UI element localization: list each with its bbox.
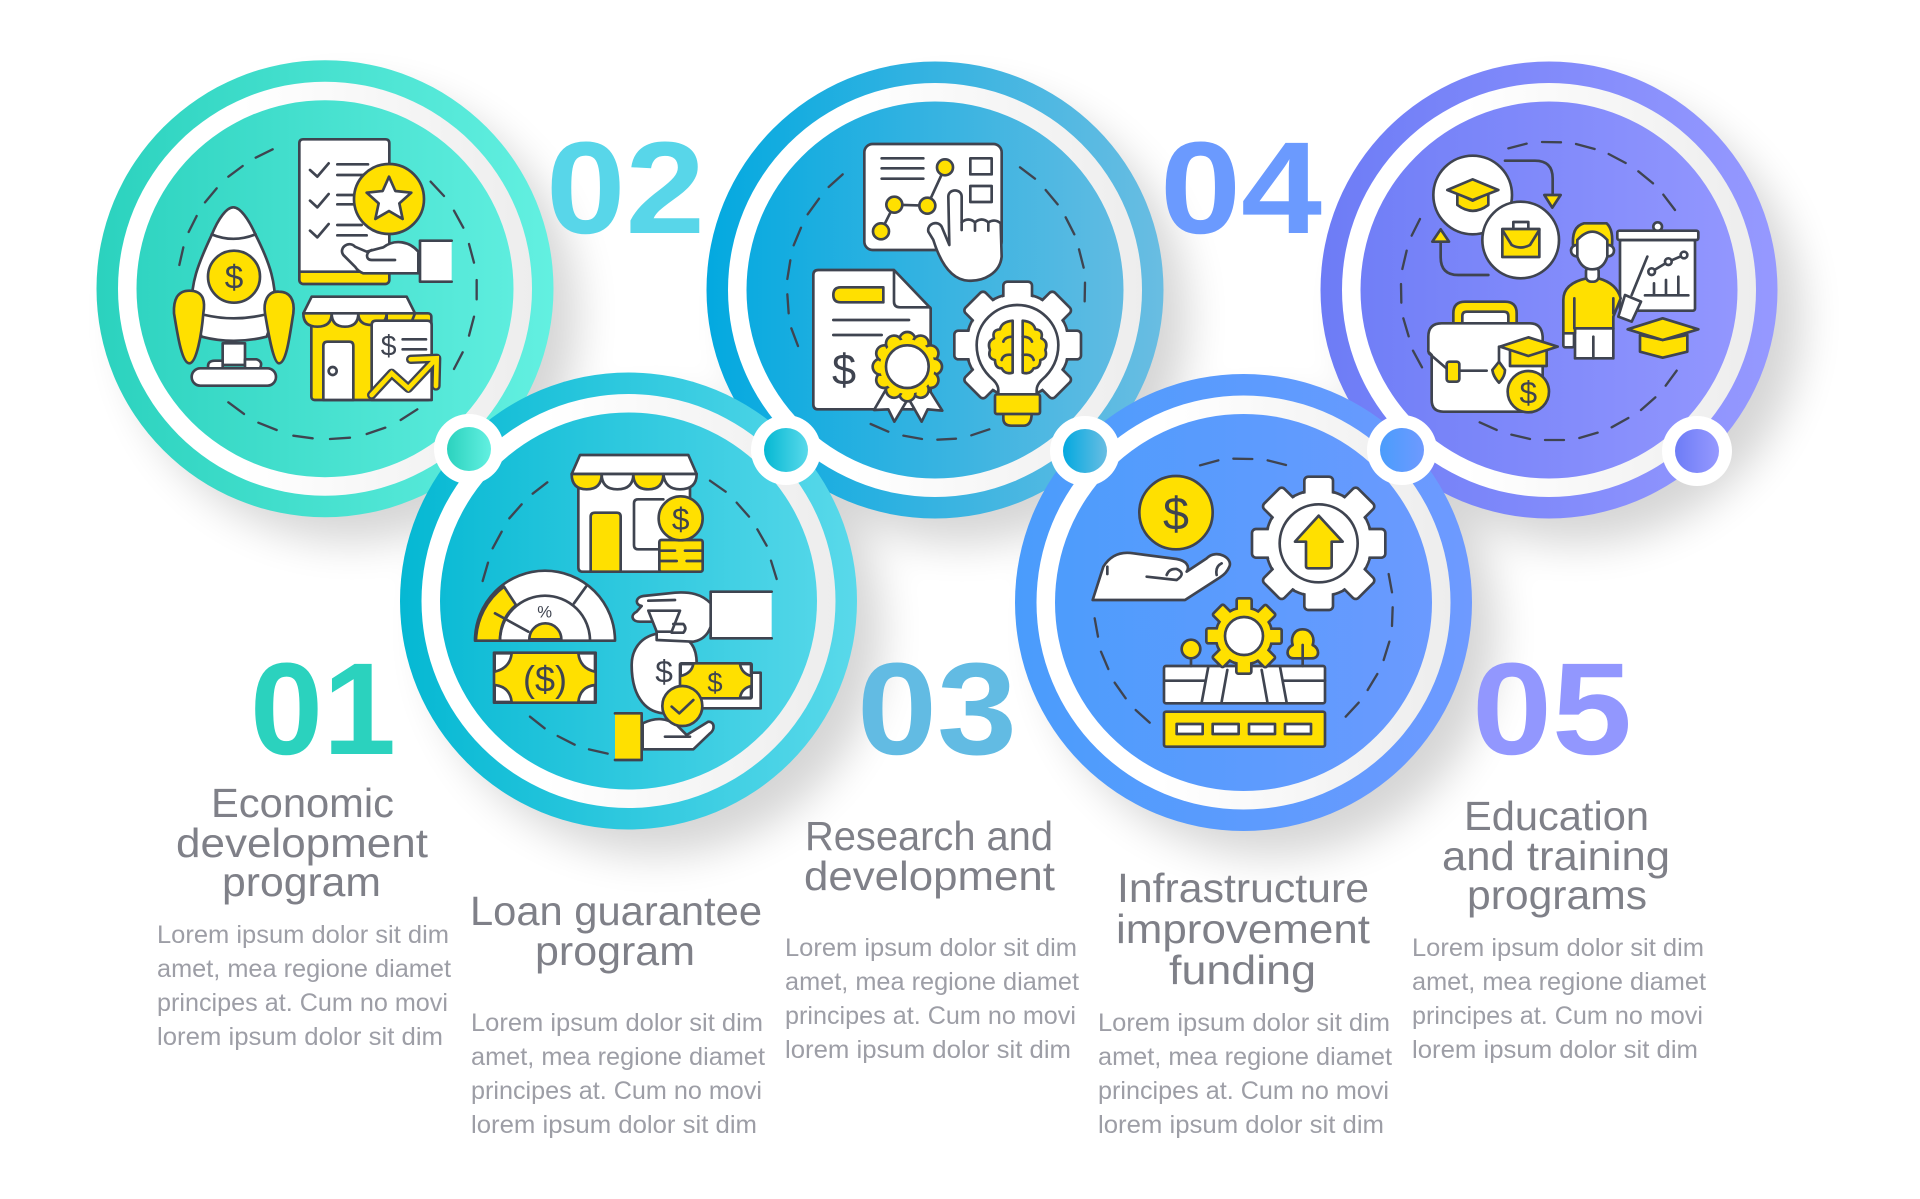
body text: step 3: amet, mea regione diamet — [785, 968, 1079, 996]
icon: store, gauge and money bag: % — [537, 602, 552, 621]
icon: rocket, checklist and store — [174, 139, 477, 439]
heading: step 1 — [176, 780, 429, 905]
body text: step 4: principes at. Cum no movi — [1098, 1077, 1389, 1105]
icon: rocket, checklist and store: $ — [381, 330, 397, 362]
body text: step 5: principes at. Cum no movi — [1412, 1002, 1703, 1030]
body text: step 5 — [1412, 934, 1706, 1064]
body text: step 5: lorem ipsum dolor sit dim — [1412, 1036, 1698, 1064]
heading: step 2: program — [535, 928, 695, 974]
body text: step 2: lorem ipsum dolor sit dim — [471, 1111, 757, 1139]
icon: store, gauge and money bag: ($) — [523, 658, 567, 699]
body text: step 5: amet, mea regione diamet — [1412, 968, 1706, 996]
panel: step 3 circle — [706, 62, 1164, 518]
body text: step 1: principes at. Cum no movi — [157, 989, 448, 1017]
body text: step 4: Lorem ipsum dolor sit dim — [1098, 1009, 1390, 1037]
heading: step 1: program — [222, 859, 381, 905]
body text: step 1: Lorem ipsum dolor sit dim — [157, 921, 449, 949]
heading: step 4 — [1116, 865, 1371, 993]
connector dot 4 — [1367, 415, 1437, 485]
body text: step 3: lorem ipsum dolor sit dim — [785, 1036, 1071, 1064]
heading: step 3: development — [804, 853, 1056, 899]
number 05: 05 — [1472, 635, 1632, 782]
icon: chart, certificate and brain gear — [787, 144, 1085, 440]
heading: step 4: Infrastructure — [1117, 865, 1369, 911]
connector dot 5 — [1662, 416, 1732, 486]
icon: chart, certificate and brain gear: $ — [832, 347, 856, 395]
heading: step 4: improvement — [1116, 906, 1371, 952]
heading: step 5 — [1442, 793, 1670, 918]
heading: step 5: programs — [1467, 872, 1647, 918]
number 01: 01 — [250, 635, 396, 782]
body text: step 3: Lorem ipsum dolor sit dim — [785, 934, 1077, 962]
icon: funding hand, upgrade gear and road: $ — [1163, 487, 1189, 539]
circle drop shadows — [126, 90, 1802, 856]
number 02: 02 — [546, 114, 705, 261]
heading: step 5: and training — [1442, 833, 1670, 879]
icon: funding hand, upgrade gear and road — [1093, 459, 1393, 747]
heading: step 1: Economic — [211, 780, 394, 826]
icon: store, gauge and money bag — [475, 455, 777, 760]
body text: step 4: amet, mea regione diamet — [1098, 1043, 1392, 1071]
panel: step 4 circle — [1015, 374, 1472, 831]
body text: step 3: principes at. Cum no movi — [785, 1002, 1076, 1030]
body text: step 1: lorem ipsum dolor sit dim — [157, 1023, 443, 1051]
heading: step 1: development — [176, 820, 429, 866]
body text: step 2: principes at. Cum no movi — [471, 1077, 762, 1105]
body text: step 3 — [785, 934, 1079, 1064]
heading: step 5: Education — [1464, 793, 1649, 839]
icon: education, teacher and briefcase: $ — [1520, 374, 1538, 410]
icon: rocket, checklist and store: $ — [225, 260, 243, 297]
number 04: 04 — [1160, 114, 1322, 261]
heading: step 3 — [804, 813, 1056, 899]
body text: step 4 — [1098, 1009, 1392, 1139]
icon: store, gauge and money bag: $ — [655, 654, 673, 690]
connector dot 1 — [434, 414, 504, 484]
panel: step 2 circle — [400, 372, 857, 830]
heading: step 2 — [470, 888, 762, 974]
icon: store, gauge and money bag: $ — [672, 501, 690, 537]
number 03: 03 — [857, 635, 1017, 782]
icon: store, gauge and money bag: $ — [707, 667, 723, 698]
body text: step 2 — [471, 1009, 765, 1139]
body text: step 2: Lorem ipsum dolor sit dim — [471, 1009, 763, 1037]
body text: step 4: lorem ipsum dolor sit dim — [1098, 1111, 1384, 1139]
heading: step 2: Loan guarantee — [470, 888, 762, 934]
heading: step 3: Research and — [805, 813, 1053, 859]
connector dot 3 — [1050, 416, 1120, 486]
panel: step 1 circle — [96, 60, 554, 517]
panel: step 5 circle — [1320, 62, 1778, 518]
body text: step 2: amet, mea regione diamet — [471, 1043, 765, 1071]
heading: step 4: funding — [1169, 947, 1316, 993]
body text: step 5: Lorem ipsum dolor sit dim — [1412, 934, 1704, 962]
body text: step 1: amet, mea regione diamet — [157, 955, 451, 983]
body text: step 1 — [157, 921, 451, 1051]
icon: education, teacher and briefcase — [1401, 142, 1698, 440]
connector dot 2 — [751, 415, 821, 485]
